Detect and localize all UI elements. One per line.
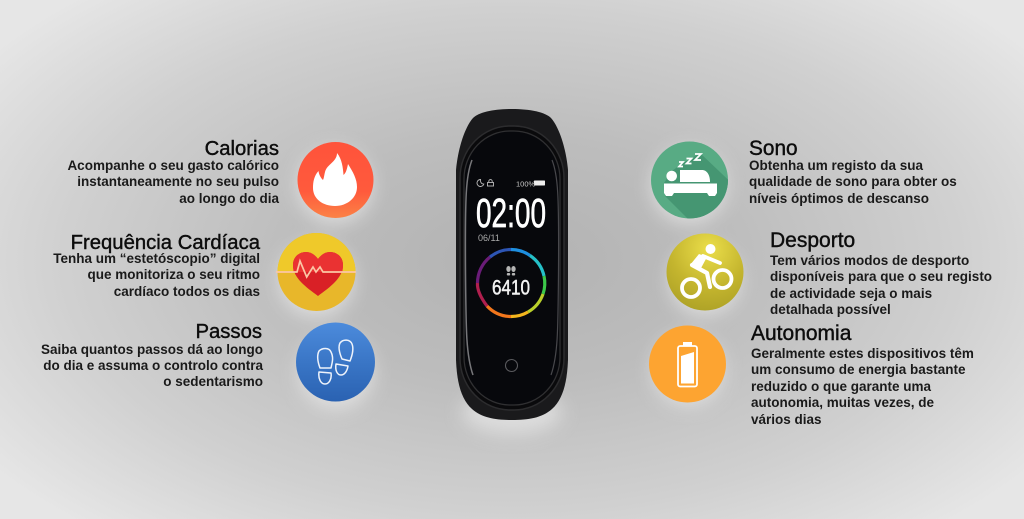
text: calorias: ao longo do dia <box>179 191 279 206</box>
icon: flame <box>298 142 374 218</box>
panel: frequência cardíaca <box>53 232 356 311</box>
band body <box>460 126 564 410</box>
text: sono: qualidade de sono para obter os <box>749 174 957 189</box>
text: passos: do dia e assuma o controlo contra <box>43 358 263 373</box>
steps icon <box>506 266 516 276</box>
panel: calorias <box>67 138 374 218</box>
text: desporto: de actividade seja o mais <box>770 286 932 301</box>
screen capsule <box>464 131 560 405</box>
step count: 6410 <box>492 276 530 300</box>
battery percent: 100% <box>516 179 536 188</box>
icon: heart <box>276 233 356 311</box>
text: frequência cardíaca: Tenha um “estetóscopio” digital <box>53 251 260 266</box>
text: calorias: Acompanhe o seu gasto calórico <box>67 158 279 173</box>
heading: sono: Sono <box>749 136 798 160</box>
icon: cyclist <box>666 234 744 310</box>
text: autonomia: autonomia, muitas vezes, de <box>751 395 934 410</box>
heading: passos: Passos <box>195 321 262 343</box>
panel: passos <box>41 321 375 402</box>
text: calorias <box>67 158 280 206</box>
smart band <box>456 109 568 420</box>
text: desporto: disponíveis para que o seu registo <box>770 269 992 284</box>
activity ring <box>477 250 545 317</box>
text: autonomia: um consumo de energia bastante <box>751 362 966 377</box>
panel: autonomia <box>649 322 974 427</box>
heading: desporto: Desporto <box>770 229 855 252</box>
home button <box>506 360 518 372</box>
panel: desporto <box>666 229 992 317</box>
text: desporto: Tem vários modos de desporto <box>770 253 969 268</box>
text: passos <box>41 342 264 389</box>
text: passos: o sedentarismo <box>163 374 263 389</box>
icon: battery <box>649 326 726 402</box>
heading: autonomia: Autonomia <box>751 322 851 345</box>
text: passos: Saiba quantos passos dá ao longo <box>41 342 263 356</box>
text: calorias: instantaneamente no seu pulso <box>77 174 279 189</box>
text: frequência cardíaca <box>53 251 260 299</box>
icon: sleeping in bed <box>651 142 728 218</box>
panel: sono <box>651 136 957 218</box>
text: sono: níveis óptimos de descanso <box>749 191 929 206</box>
heading: calorias: Calorias <box>205 138 279 160</box>
strap <box>456 109 568 420</box>
text: sono: Obtenha um registo da sua <box>749 158 923 173</box>
text: sono <box>749 158 957 206</box>
text: autonomia <box>751 346 974 427</box>
text: frequência cardíaca: cardíaco todos os dias <box>114 284 260 299</box>
text: autonomia: reduzido o que garante uma <box>751 379 931 394</box>
text: desporto: detalhada possível <box>770 302 891 317</box>
heading: frequência cardíaca: Frequência Cardíaca <box>71 232 260 254</box>
status icons <box>477 179 545 186</box>
icon: footprints <box>296 322 375 402</box>
text: desporto <box>770 253 992 317</box>
text: frequência cardíaca: que monitoriza o seu ritmo <box>87 267 260 282</box>
date: 06/11 <box>478 233 500 243</box>
text: autonomia: vários dias <box>751 412 822 427</box>
text: autonomia: Geralmente estes dispositivos têm <box>751 346 974 361</box>
